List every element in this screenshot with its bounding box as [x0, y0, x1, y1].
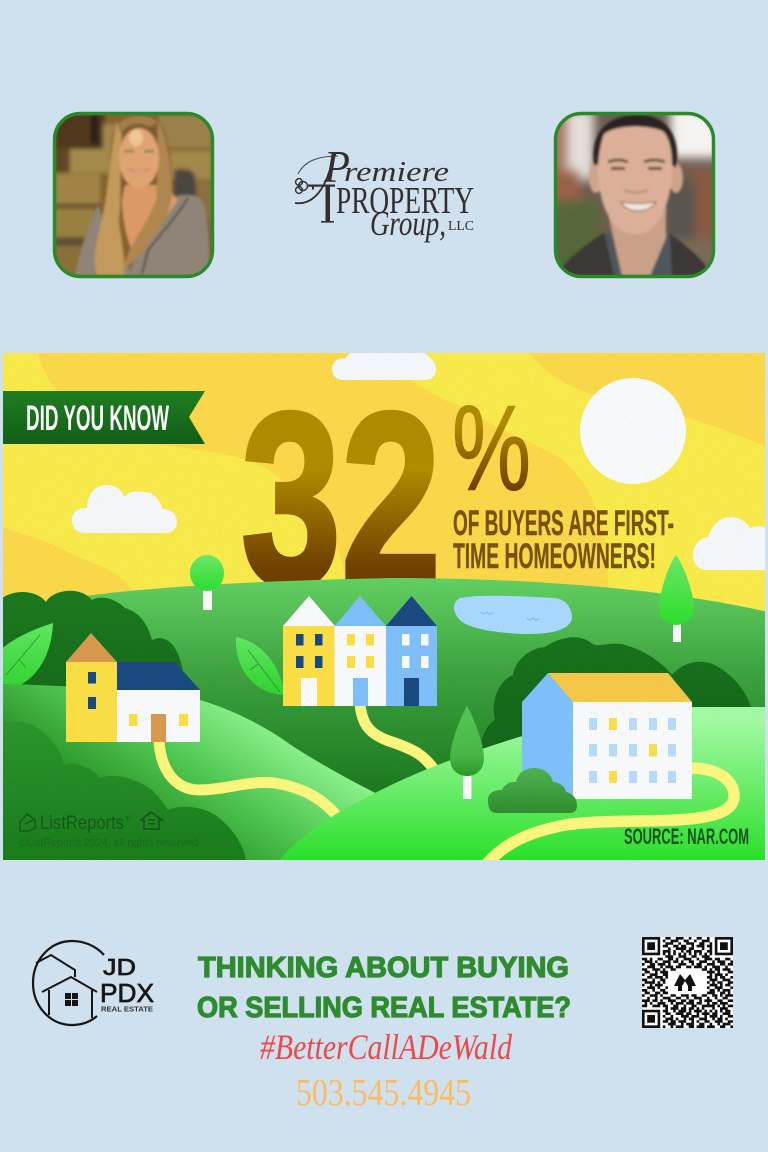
- film grain: [3, 353, 765, 860]
- leaf: center: [236, 637, 285, 695]
- bushes: right dark: [482, 637, 751, 748]
- JD PDX real estate logo: [33, 941, 154, 1025]
- ribbon: did you know: [3, 391, 205, 444]
- frame: [556, 114, 714, 276]
- agent photo: woman: [54, 114, 212, 276]
- leaf: left: [3, 623, 53, 684]
- panel: infographic banner: [0, 353, 768, 866]
- brokerage logo: Premiere Property Group: Group,: [370, 204, 446, 243]
- back hill: [46, 578, 765, 793]
- percent sign: %: [452, 380, 531, 516]
- shrub: [488, 768, 577, 813]
- hashtag: #BetterCallADeWald: [260, 1027, 513, 1067]
- path: townhouses: [360, 704, 438, 775]
- brokerage logo: Premiere Property Group: remiere: [344, 157, 449, 188]
- townhouses: [283, 596, 437, 706]
- long hair strands: [95, 122, 124, 276]
- sky: [3, 353, 765, 602]
- house: left: [66, 633, 200, 742]
- phone number: 503.545.4945: [296, 1072, 471, 1114]
- cardigan seam: [142, 198, 188, 274]
- listreports logo: [19, 812, 198, 849]
- smile: [621, 202, 656, 211]
- path: left house: [159, 740, 340, 820]
- call to action heading: OR SELLING REAL ESTATE?: [197, 992, 571, 1024]
- bushes: bottom left: [0, 722, 246, 862]
- QR code: [642, 937, 733, 1028]
- listreports logo: ®: [126, 815, 132, 823]
- frame: [54, 114, 212, 276]
- chest: [122, 185, 178, 254]
- hill: right light: [278, 707, 768, 862]
- hair back: [110, 122, 172, 184]
- JD PDX real estate logo: PDX: [100, 978, 154, 1008]
- call to action heading: THINKING ABOUT BUYING: [198, 952, 569, 984]
- brokerage logo: Premiere Property Group: LLC: [448, 219, 474, 234]
- shirt: [604, 232, 672, 276]
- face: [598, 120, 672, 234]
- sun: [580, 378, 686, 484]
- brows and eyes: [608, 160, 628, 162]
- JD PDX real estate logo: JD: [103, 954, 136, 980]
- hair: [593, 115, 677, 168]
- face: [119, 128, 159, 188]
- statistic text: [453, 510, 674, 568]
- brokerage logo: Premiere Property Group: PROPERTY: [336, 180, 474, 222]
- cloud: left: [72, 485, 177, 533]
- big number 32: 32: [241, 362, 441, 637]
- apartment building: [522, 673, 692, 799]
- pond: [454, 596, 572, 634]
- ribbon: did you know: DID YOU KNOW: [26, 399, 169, 438]
- cloud: right: [693, 517, 768, 570]
- neck: [606, 205, 666, 276]
- cardigan: [75, 195, 209, 276]
- tree: top left: [190, 555, 224, 610]
- bushes: left dark: [3, 590, 183, 686]
- tree: top right: [659, 555, 694, 642]
- path: apartment: [485, 768, 734, 866]
- JD PDX real estate logo: REAL ESTATE: [101, 1006, 153, 1014]
- brokerage logo: Premiere Property Group: [295, 141, 474, 243]
- tree: center: [450, 706, 484, 799]
- listreports logo: ListReports: [40, 813, 124, 834]
- icon: twin arrow houses: [674, 974, 696, 991]
- ears: [589, 163, 603, 193]
- key icon: [296, 179, 335, 223]
- brokerage logo: Premiere Property Group: P: [323, 141, 350, 192]
- agent photo: man: [550, 108, 720, 280]
- call to action heading: [197, 952, 571, 1024]
- listreports logo: ©ListReports 2024, all rights reserved: [19, 837, 198, 849]
- icon: equal housing: [141, 812, 162, 829]
- sky bands: [3, 353, 768, 620]
- jacket: [558, 232, 712, 276]
- hill: left light: [0, 684, 385, 860]
- cloud: top: [332, 353, 436, 380]
